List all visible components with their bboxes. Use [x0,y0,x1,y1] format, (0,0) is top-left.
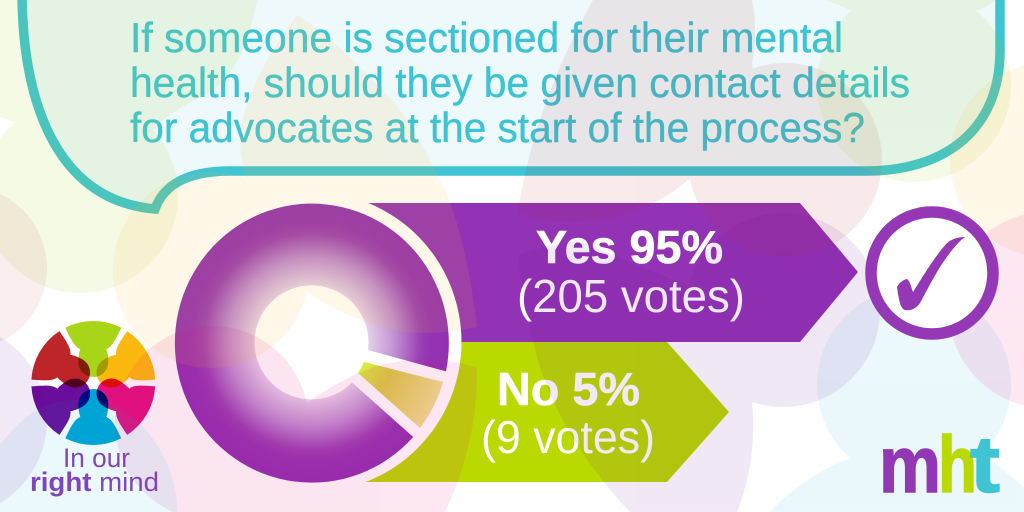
bar: yes [312,203,858,342]
logo wordmark: right mind [30,467,159,497]
logo: mht: t [970,420,1000,509]
donut chart [175,204,449,483]
yes label: (205 votes) [517,270,745,322]
logo emblem [26,321,161,445]
slice: yes 95% [175,204,449,483]
no label: No 5% [497,363,640,415]
question text: for advocates at the start of the process? [130,104,865,151]
slice: no 5% [358,362,443,428]
icon: check mark in circle [871,212,993,334]
speech bubble [22,0,1000,209]
question text: If someone is sectioned for their mental [130,14,843,61]
no label [481,363,655,463]
logo: in our right mind [26,321,161,497]
yes label [517,221,745,322]
logo: mht: h [938,420,977,509]
yes label: Yes 95% [536,221,723,273]
logo: mht [879,420,1000,509]
donut gap ring [162,192,462,492]
logo wordmark: In our [63,443,130,473]
logo: mht: m [879,420,941,509]
no label: (9 votes) [481,411,655,463]
logo wordmark [30,443,159,497]
bar: no [312,342,729,482]
question text: health, should they be given contact details [130,59,910,106]
question text [130,14,910,151]
